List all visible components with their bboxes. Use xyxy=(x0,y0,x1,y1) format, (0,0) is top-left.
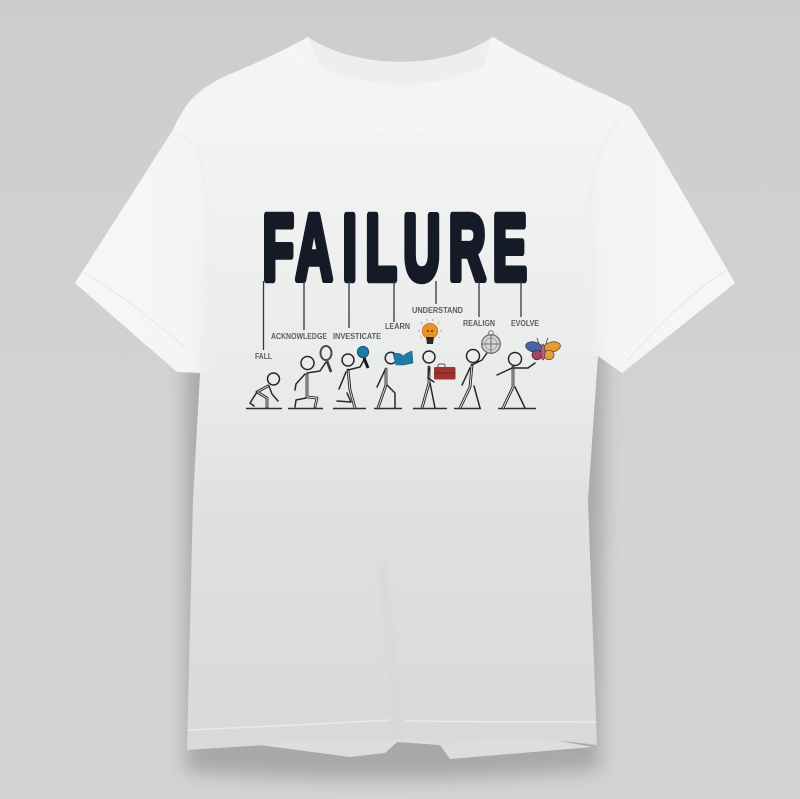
icon: blue book xyxy=(393,351,413,365)
right sleeve seam xyxy=(590,107,630,356)
bottom hem stitch xyxy=(188,720,596,730)
step labels xyxy=(255,306,540,361)
figure 1: fall xyxy=(246,373,282,408)
left sleeve hem stitch xyxy=(84,272,186,348)
figure 7: evolve xyxy=(497,338,561,408)
figure 6: realign xyxy=(454,331,500,408)
centre fold xyxy=(382,560,397,738)
icon: magnifying glass outline xyxy=(320,346,332,372)
icon: compass xyxy=(482,331,500,353)
figure 2: acknowledge xyxy=(288,346,332,408)
connector lines xyxy=(264,281,521,350)
icon: butterfly xyxy=(525,338,561,360)
title: FAILURE: FAILURE xyxy=(263,195,527,299)
right sleeve hem stitch xyxy=(628,270,726,360)
step labels: EVOLVE xyxy=(511,319,540,328)
step labels: FALL xyxy=(255,352,272,361)
shirt body xyxy=(75,37,735,750)
icon: light bulb xyxy=(418,319,442,344)
back collar band xyxy=(308,37,493,85)
figure 5: understand xyxy=(413,319,456,408)
step labels: LEARN xyxy=(385,322,410,331)
right sleeve xyxy=(585,84,735,373)
icon: red briefcase xyxy=(434,364,456,380)
shirt drop shadow xyxy=(186,300,604,779)
figure 4: learn xyxy=(374,351,413,408)
step labels: ACKNOWLEDGE xyxy=(271,332,328,341)
step labels: UNDERSTAND xyxy=(412,306,463,315)
t-shirt xyxy=(75,37,735,759)
figure 3: investigate xyxy=(333,346,369,408)
left sleeve xyxy=(75,81,215,373)
icon: blue magnifying glass xyxy=(357,346,369,368)
step labels: INVESTICATE xyxy=(333,332,382,341)
front collar seam xyxy=(293,37,493,133)
inside back hem xyxy=(260,730,592,759)
left sleeve seam xyxy=(173,130,210,373)
step labels: REALIGN xyxy=(463,319,495,328)
